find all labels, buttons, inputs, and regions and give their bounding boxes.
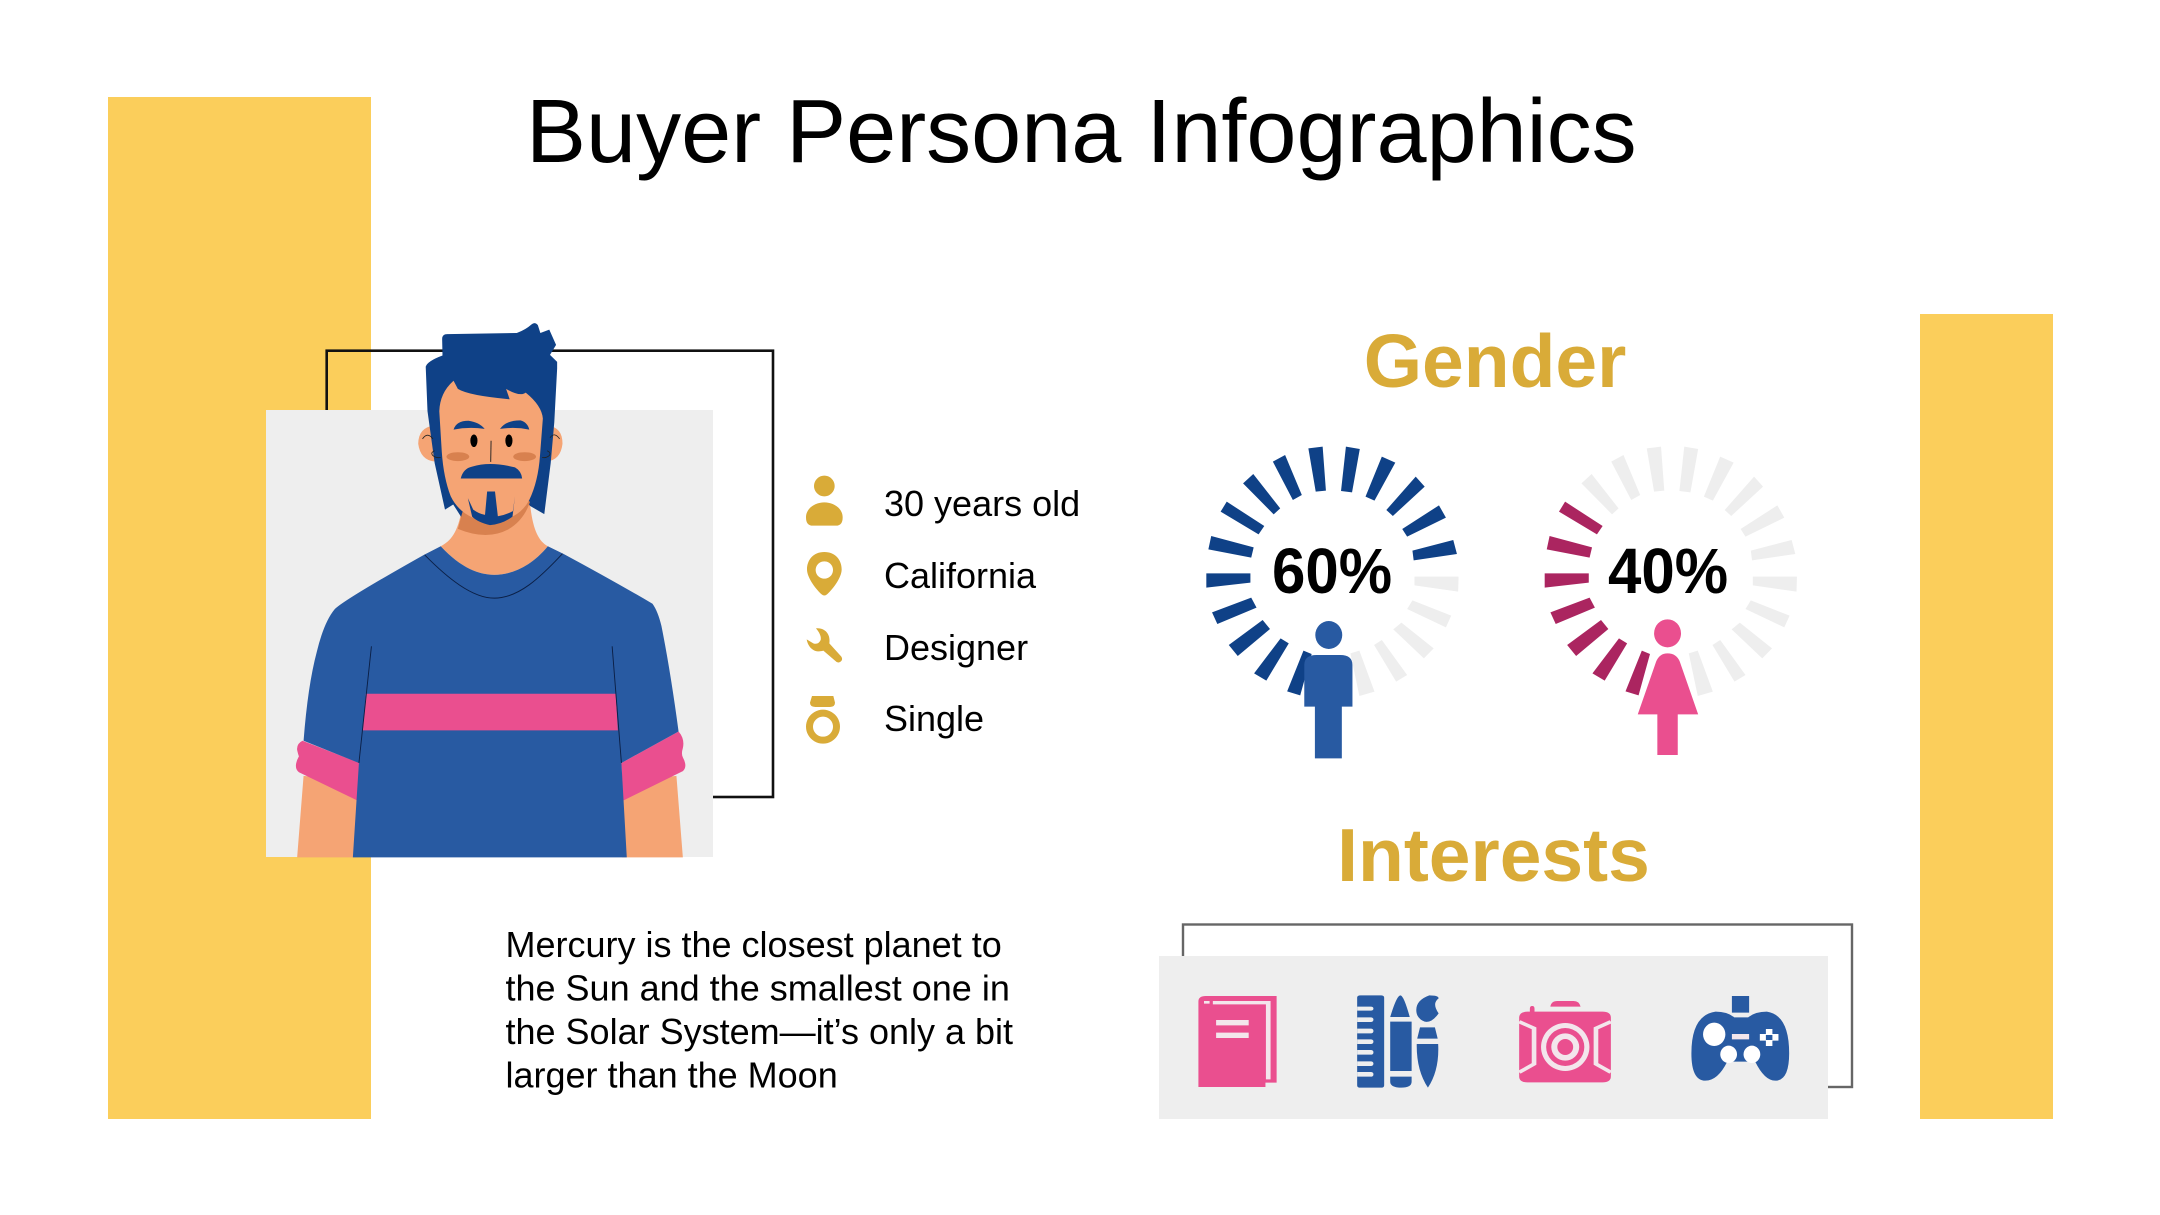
persona attribute icons (806, 476, 843, 744)
percentage: 40% (1608, 536, 1728, 607)
icon: ruler, pencil and brush (1357, 995, 1439, 1088)
nose (489, 441, 492, 462)
interests grey panel (1159, 956, 1828, 1119)
active ticks (1545, 502, 1650, 695)
interest icons (1198, 995, 1789, 1088)
shirt (304, 546, 679, 857)
interests frame outline (1183, 924, 1852, 1087)
icon: ring (806, 696, 840, 744)
tick ring (1206, 447, 1459, 758)
tick ring (1545, 447, 1797, 755)
icon: person (806, 476, 843, 526)
inactive ticks (1350, 577, 1459, 696)
age: 30 years old (884, 483, 1080, 524)
face (439, 381, 543, 522)
neck (441, 504, 548, 575)
cheeks (446, 452, 536, 461)
title: Buyer Persona Infographics (526, 82, 1637, 182)
shirt stripe (363, 694, 618, 730)
gender gauge: female 40% (1545, 447, 1797, 755)
icon: man (1304, 621, 1352, 758)
gender gauge: male 60% (1206, 447, 1459, 758)
job: Designer (884, 627, 1028, 668)
moustache (461, 464, 522, 479)
status: Single (884, 698, 984, 739)
right yellow band (1920, 314, 2053, 1119)
description paragraph: the Solar System—it’s only a bit (506, 1011, 1013, 1052)
eyebrows (454, 420, 529, 430)
icon: camera (1519, 1001, 1611, 1082)
gender heading: Gender (1364, 319, 1626, 403)
percentage: 60% (1272, 536, 1392, 607)
portrait grey panel (266, 410, 713, 857)
eyes (470, 434, 512, 447)
ears (418, 426, 562, 461)
description paragraph: larger than the Moon (506, 1054, 838, 1096)
icon: location pin (807, 552, 842, 595)
persona attribute list (884, 483, 1080, 739)
icon: game controller (1691, 996, 1789, 1081)
neck shadow (458, 496, 530, 535)
goatee (468, 491, 515, 525)
icon: woman (1638, 619, 1698, 755)
interests heading: Interests (1337, 813, 1650, 897)
arms (297, 776, 683, 857)
active ticks (1206, 447, 1457, 695)
inactive ticks (1581, 447, 1797, 696)
persona illustration (296, 323, 685, 857)
description paragraph (506, 924, 1013, 1096)
sleeve cuffs (296, 731, 685, 801)
hair (426, 323, 557, 519)
ear details (422, 435, 560, 458)
icon: book (1198, 996, 1277, 1087)
description paragraph: Mercury is the closest planet to (506, 924, 1002, 965)
shirt seams (359, 554, 621, 763)
portrait frame outline (327, 351, 773, 797)
icon: wrench (807, 628, 842, 662)
location: California (884, 555, 1037, 596)
left yellow band (108, 97, 371, 1119)
description paragraph: the Sun and the smallest one in (506, 968, 1010, 1008)
